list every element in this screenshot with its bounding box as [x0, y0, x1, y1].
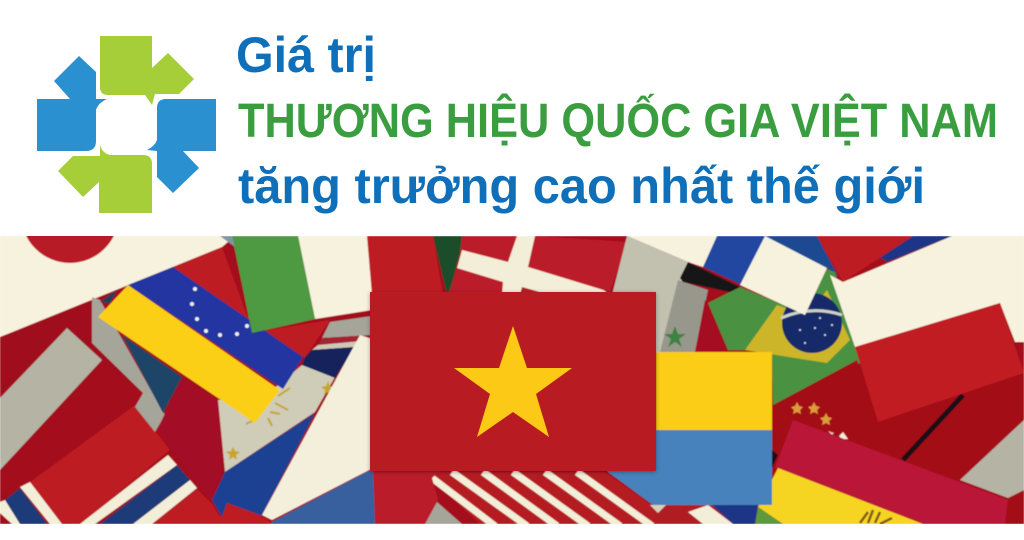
flag: red behind Venezuela — [173, 247, 330, 358]
icon: yellow star — [454, 326, 572, 437]
flags: lower left stripes — [0, 327, 222, 524]
flag: grey with green star — [612, 236, 740, 352]
flag: Japan — [0, 236, 233, 338]
title — [236, 27, 998, 214]
flag: Venezuela — [98, 267, 303, 423]
logo: four speech-arrow cross — [37, 36, 216, 213]
flag: Vietnam — [370, 292, 656, 471]
flag: yellow and blue bicolour — [608, 352, 772, 505]
flag: Spain — [755, 420, 1008, 524]
flag: USA stripes — [430, 472, 665, 526]
flag: Philippines — [212, 365, 335, 524]
flag: Poland — [830, 236, 1024, 422]
flag: bottom cream and navy — [650, 505, 758, 524]
flag: dark navy and grey stripes — [302, 316, 372, 378]
flag: lower centre red and grey — [373, 471, 462, 524]
flag: red and green top centre — [367, 236, 464, 295]
flag: blue tilted — [703, 236, 838, 285]
flag: dark red with stars — [771, 360, 1020, 498]
banner: collage of world flags — [0, 236, 1024, 524]
flag: Denmark — [448, 236, 627, 295]
flag: Brazil — [708, 268, 860, 405]
flag: grey right edge — [960, 420, 1024, 498]
flag: cream and blue lower centre — [262, 335, 378, 524]
title line 1: Giá trị — [236, 27, 376, 83]
flag: green and cream — [220, 236, 376, 333]
title line 3: tăng trưởng cao nhất thế giới — [238, 158, 925, 214]
flag: grey and navy pieces — [92, 290, 223, 517]
flag: red and navy top right — [817, 236, 952, 282]
flag: cream rectangle over Brazil — [740, 236, 827, 315]
